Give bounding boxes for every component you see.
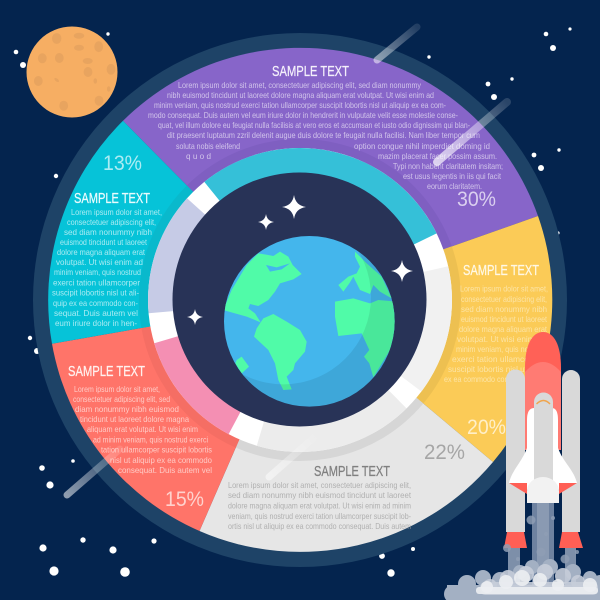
body copy: nisl ut aliquip ex ea commodo bbox=[110, 455, 212, 465]
heading: SAMPLE TEXT bbox=[74, 191, 150, 207]
heading: SAMPLE TEXT bbox=[272, 64, 349, 80]
meteor: upper right bbox=[437, 102, 507, 162]
text: cyan segment bbox=[52, 152, 162, 328]
body copy: consectetuer adipiscing elit, sed bbox=[73, 394, 170, 404]
body copy: ad minim veniam, quis nostrud exerci bbox=[93, 434, 208, 444]
meteor: top bbox=[377, 27, 417, 60]
body copy: quat, vel illum dolore eu feugiat nulla facilisis at vero eros et accumsan et iusto odio dignissim qui blan- bbox=[158, 120, 470, 130]
body copy: soluta nobis eleifend bbox=[176, 141, 240, 151]
center tank bbox=[534, 392, 553, 482]
text: red segment bbox=[68, 364, 212, 511]
panel: gray segment bbox=[200, 300, 493, 552]
body copy: dolore magna aliquam erat bbox=[459, 324, 548, 334]
body copy: eum iriure dolor in hen- bbox=[55, 318, 137, 328]
body copy: dit praesent luptatum zzril delenit augue duis dolore te feugait nulla facilisi. Nam liber tempor cum bbox=[167, 130, 480, 140]
icon: sparkle stars bbox=[187, 195, 413, 325]
body copy bbox=[444, 284, 548, 384]
percentage: 13% bbox=[103, 152, 142, 175]
body copy bbox=[148, 80, 503, 191]
body copy: Lorem ipsum dolor sit amet, bbox=[460, 284, 548, 294]
body copy: mazim placerat facer possim assum. bbox=[378, 151, 497, 161]
body copy: sed diam nonummy nibh bbox=[64, 227, 152, 237]
body copy: Typi non habent claritatem insitam; bbox=[393, 161, 503, 171]
body copy: ortis nisl ut aliquip ex ea commodo consequat. Duis autem bbox=[228, 521, 411, 531]
body copy: tincidunt ut laoreet dolore magna bbox=[80, 414, 189, 424]
body copy: quip ex ea commodo con- bbox=[53, 298, 138, 308]
panel: purple segment bbox=[123, 48, 538, 300]
body copy: suscipit lobortis nisl ut ali- bbox=[52, 288, 139, 298]
body copy: dolore magna aliquam erat volutpat. Ut wisi enim ad minim bbox=[228, 500, 411, 510]
booster nozzles bbox=[504, 532, 583, 548]
body copy: exerci tation ullamcorper bbox=[53, 278, 140, 288]
body copy: consectetuer adipiscing elit, bbox=[67, 217, 156, 227]
percentage: 30% bbox=[457, 188, 496, 211]
body copy: suscipit lobortis nisl ut ali- bbox=[448, 364, 540, 374]
body copy: nibh euismod tincidunt ut laoreet dolore magna aliquam erat volutpat. Ut wisi enim ad bbox=[167, 90, 434, 100]
exhaust trails bbox=[508, 500, 576, 600]
body copy bbox=[73, 384, 212, 475]
body copy bbox=[52, 207, 162, 328]
body copy: veniam, quis nostrud exerci tation ullamcorper suscipit lob- bbox=[228, 511, 411, 521]
body copy: minim veniam, quis nostrud exerci tation ullamcorper suscipit lobortis nisl ut aliquip ex ea com- bbox=[154, 100, 446, 110]
body copy: aliquam erat volutpat. Ut wisi enim bbox=[87, 424, 198, 434]
engine block bbox=[527, 477, 559, 503]
text: gray segment bbox=[228, 441, 465, 531]
body copy: q u o d bbox=[186, 151, 211, 161]
orange tank stripe bbox=[536, 400, 550, 404]
body copy: euismod tincidunt ut laoreet bbox=[60, 237, 148, 247]
text: yellow segment bbox=[444, 263, 548, 439]
body copy: diam nonummy nibh euismod bbox=[75, 404, 179, 414]
shuttle body bbox=[509, 408, 577, 490]
smoke puffs bbox=[444, 516, 600, 600]
body copy: Lorem ipsum dolor sit amet, consectetuer adipiscing elit, bbox=[228, 480, 411, 490]
body copy: dolore magna aliquam erat bbox=[57, 247, 146, 257]
text: purple segment bbox=[148, 64, 503, 211]
body copy: est usus legentis in iis qui facit bbox=[403, 171, 502, 181]
icon: earth globe bbox=[224, 236, 395, 407]
body copy: ex ea commodo consequat. bbox=[444, 374, 532, 384]
body copy: consectetuer adipiscing elit, bbox=[461, 294, 547, 304]
body copy: volutpat. Ut wisi enim ad bbox=[56, 257, 143, 267]
body copy: sequat. Duis autem vel bbox=[54, 308, 138, 318]
panel: cyan segment bbox=[48, 121, 300, 344]
nose and orbiter tank bbox=[525, 332, 561, 450]
body copy: Lorem ipsum dolor sit amet, bbox=[74, 384, 160, 394]
right booster bbox=[562, 370, 580, 532]
panel: red segment bbox=[52, 300, 300, 531]
heading: SAMPLE TEXT bbox=[314, 464, 390, 480]
body copy: minim veniam, quis nostrud bbox=[54, 267, 141, 277]
planet: orange moon bbox=[26, 26, 118, 118]
body copy: euismod tincidunt ut laoreet bbox=[461, 314, 548, 324]
percentage: 22% bbox=[424, 441, 465, 464]
percentage: 20% bbox=[467, 416, 506, 439]
body copy: tation ullamcorper suscipit lobortis bbox=[101, 444, 212, 454]
body copy: modo consequat. Duis autem vel eum iriure dolor in hendrerit in vulputate velit esse molestie conse- bbox=[148, 110, 458, 120]
rocket: space shuttle bbox=[444, 332, 600, 600]
body copy: eorum claritatem. bbox=[427, 181, 482, 191]
panel: yellow segment bbox=[300, 216, 552, 462]
body copy: Lorem ipsum dolor sit amet, bbox=[71, 207, 162, 217]
body copy: minim veniam, quis nostrud bbox=[456, 344, 545, 354]
body copy: sed diam nonummy nibh bbox=[461, 304, 547, 314]
meteor: bottom bbox=[269, 434, 318, 477]
heading: SAMPLE TEXT bbox=[463, 263, 539, 279]
inner ring with colored arcs bbox=[148, 148, 452, 452]
left booster bbox=[506, 370, 525, 532]
heading: SAMPLE TEXT bbox=[68, 364, 145, 380]
body copy: Lorem ipsum dolor sit amet, consectetuer adipiscing elit, sed diam nonummy bbox=[178, 80, 422, 90]
percentage: 15% bbox=[165, 488, 204, 511]
dark space disc bbox=[172, 172, 426, 426]
body copy: option congue nihil imperdiet doming id bbox=[354, 141, 490, 151]
meteor: lower left bbox=[67, 449, 120, 495]
body copy bbox=[228, 480, 412, 531]
body copy: volutpat. Ut wisi enim ad bbox=[457, 334, 546, 344]
body copy: exerci tation ullamcorper bbox=[452, 354, 544, 364]
body copy: consequat. Duis autem vel bbox=[118, 465, 212, 475]
red wing tips bbox=[509, 483, 577, 494]
body copy: sed diam nonummy nibh euismod tincidunt ut laoreet bbox=[228, 490, 412, 500]
outer ring bbox=[33, 33, 567, 567]
